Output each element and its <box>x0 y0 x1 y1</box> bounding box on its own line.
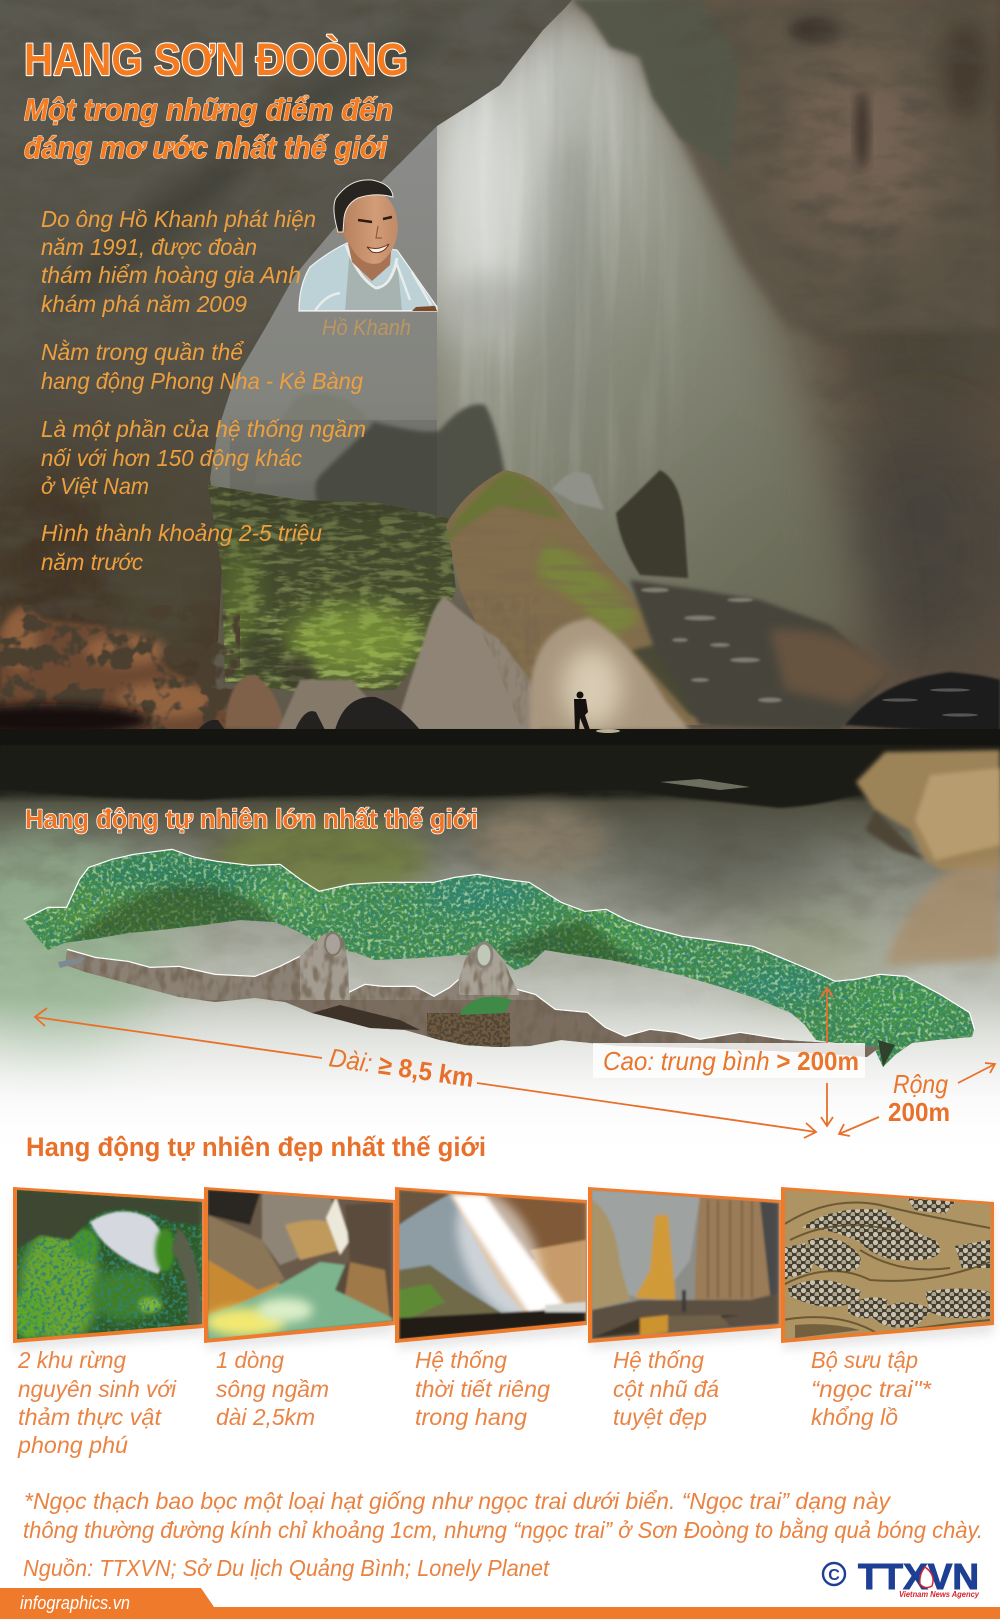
subtitle: đáng mơ ước nhất thế giới <box>24 130 388 165</box>
title: HANG SƠN ĐOÒNG <box>24 34 408 85</box>
arrow: length left <box>35 1008 322 1058</box>
label: height: Cao: trung bình > 200m <box>603 1046 859 1076</box>
photo frame 4: stalagmite columns <box>588 1187 782 1350</box>
portrait caption: Hồ Khanh <box>322 315 411 340</box>
subtitle <box>24 92 393 165</box>
mossy terraces <box>208 485 456 692</box>
lit rock with figure <box>530 618 690 730</box>
caption 1: thảm thực vật <box>18 1404 163 1430</box>
text block: age <box>41 520 322 575</box>
label: width word: Rộng <box>893 1069 948 1099</box>
footnote <box>23 1488 983 1543</box>
caption 5: Bộ sưu tập <box>811 1347 918 1373</box>
photo frame 1: forest <box>12 1187 205 1350</box>
pillar top with opening <box>325 933 341 955</box>
cave floor and pillars <box>60 925 890 1060</box>
label: width value: 200m <box>888 1097 950 1127</box>
caption 5: “ngọc trai"* <box>811 1376 932 1402</box>
text block: discovery: năm 1991, được đoàn <box>41 234 257 260</box>
portrait of Hồ Khanh <box>299 180 437 312</box>
tan rocks at right <box>856 750 1000 965</box>
table edge <box>299 310 437 312</box>
3D cross-section of the cave <box>20 845 980 1070</box>
arrow: width upper <box>958 1063 995 1083</box>
footnote: *Ngọc thạch bao bọc một loại hạt giống như ngọc trai dưới biển. “Ngọc trai” dạng này <box>24 1488 891 1514</box>
background photo: cave interior <box>0 0 1000 749</box>
text block: system <box>41 416 366 499</box>
ceiling rock, right of opening <box>572 0 1000 330</box>
logo: TTXVN: Vietnam News Agency <box>899 1589 980 1599</box>
brown foreground rocks <box>0 605 240 745</box>
caption 3: Hệ thống <box>415 1347 507 1373</box>
caption 2: dài 2,5km <box>216 1404 315 1430</box>
text block: location <box>41 339 363 394</box>
heading: largest cave: Hang động tự nhiên lớn nhất thế giới <box>25 804 478 834</box>
label: length: Dài: ≥ 8,5 km <box>327 1042 476 1093</box>
caption 4: Hệ thống <box>613 1347 704 1373</box>
label box: height <box>593 1043 865 1078</box>
arrow: height down <box>821 1083 833 1126</box>
text block: discovery <box>41 206 316 317</box>
dark rock behind mound <box>616 470 688 578</box>
text block: location: hang động Phong Nha - Kẻ Bàng <box>41 368 363 394</box>
silhouette of explorer <box>574 692 590 731</box>
caption 5 <box>811 1347 932 1430</box>
text block: system: Là một phần của hệ thống ngầm <box>41 416 366 442</box>
logo: TTXVN: TTXVN <box>858 1556 979 1597</box>
left arch rock <box>0 0 572 745</box>
heading: most beautiful cave: Hang động tự nhiên đẹp nhất thế giới <box>26 1132 486 1162</box>
subtitle: Một trong những điểm đến <box>24 92 393 127</box>
caption 1: 2 khu rừng <box>17 1347 126 1373</box>
arrow: width lower <box>839 1117 879 1136</box>
caption 4 <box>613 1347 719 1430</box>
rock seen behind the arch, left panel <box>200 90 437 530</box>
photo frame 2: underground river <box>204 1187 396 1350</box>
translucent left panel edge <box>230 420 437 520</box>
dark scree slope <box>630 580 890 730</box>
text block: system: ở Việt Nam <box>41 473 149 499</box>
hair <box>334 180 393 232</box>
caption 2: sông ngầm <box>216 1376 329 1402</box>
logo: TTXVN: C <box>828 1567 840 1584</box>
caption 1 <box>17 1347 177 1458</box>
text block: discovery: thám hiểm hoàng gia Anh <box>41 262 301 288</box>
caption 1: phong phú <box>17 1432 128 1458</box>
photo frame 5: cave pearls <box>781 1187 995 1350</box>
arrow: height up <box>821 988 833 1043</box>
light fog through the cave mouth <box>420 0 870 660</box>
footer site name: infographics.vn <box>20 1593 130 1613</box>
photo frame 3: light beam <box>395 1178 589 1350</box>
arrow: length right <box>477 1083 816 1138</box>
text block: age: Hình thành khoảng 2-5 triệu <box>41 520 322 546</box>
text block: system: nối với hơn 150 động khác <box>41 445 302 471</box>
caption 5: khổng lồ <box>811 1404 898 1430</box>
footer bar <box>0 1588 1000 1619</box>
caption 4: tuyệt đẹp <box>613 1404 707 1430</box>
caption 2 <box>216 1347 329 1430</box>
white outline <box>24 850 974 1040</box>
pale rock <box>395 597 540 730</box>
text block: discovery: Do ông Hồ Khanh phát hiện <box>41 206 316 232</box>
green forest roof <box>20 845 980 1070</box>
text block: discovery: khám phá năm 2009 <box>41 291 247 317</box>
eyes and smile <box>358 217 392 222</box>
caption 3: trong hang <box>415 1404 527 1430</box>
neck and face <box>347 238 392 281</box>
rock texture <box>0 0 969 621</box>
footnote: thông thường đường kính chỉ khoảng 1cm, nhưng “ngọc trai” ở Sơn Đoòng to bằng quả bóng chày. <box>23 1517 983 1543</box>
text block: age: năm trước <box>41 549 143 575</box>
caption 2: 1 dòng <box>216 1347 284 1373</box>
shirt <box>299 243 437 311</box>
caption 3: thời tiết riêng <box>415 1376 550 1402</box>
ground line <box>0 729 1000 749</box>
caption 1: nguyên sinh với <box>18 1376 177 1402</box>
source line: Nguồn: TTXVN; Sở Du lịch Quảng Bình; Lonely Planet <box>23 1555 551 1581</box>
tall moss mound <box>440 465 720 730</box>
caption 3 <box>415 1347 550 1430</box>
ear <box>336 217 346 235</box>
caption 4: cột nhũ đá <box>613 1376 719 1402</box>
reflection in water <box>0 746 1000 1096</box>
distant hills <box>315 404 506 540</box>
text block: location: Nằm trong quần thể <box>41 339 244 365</box>
